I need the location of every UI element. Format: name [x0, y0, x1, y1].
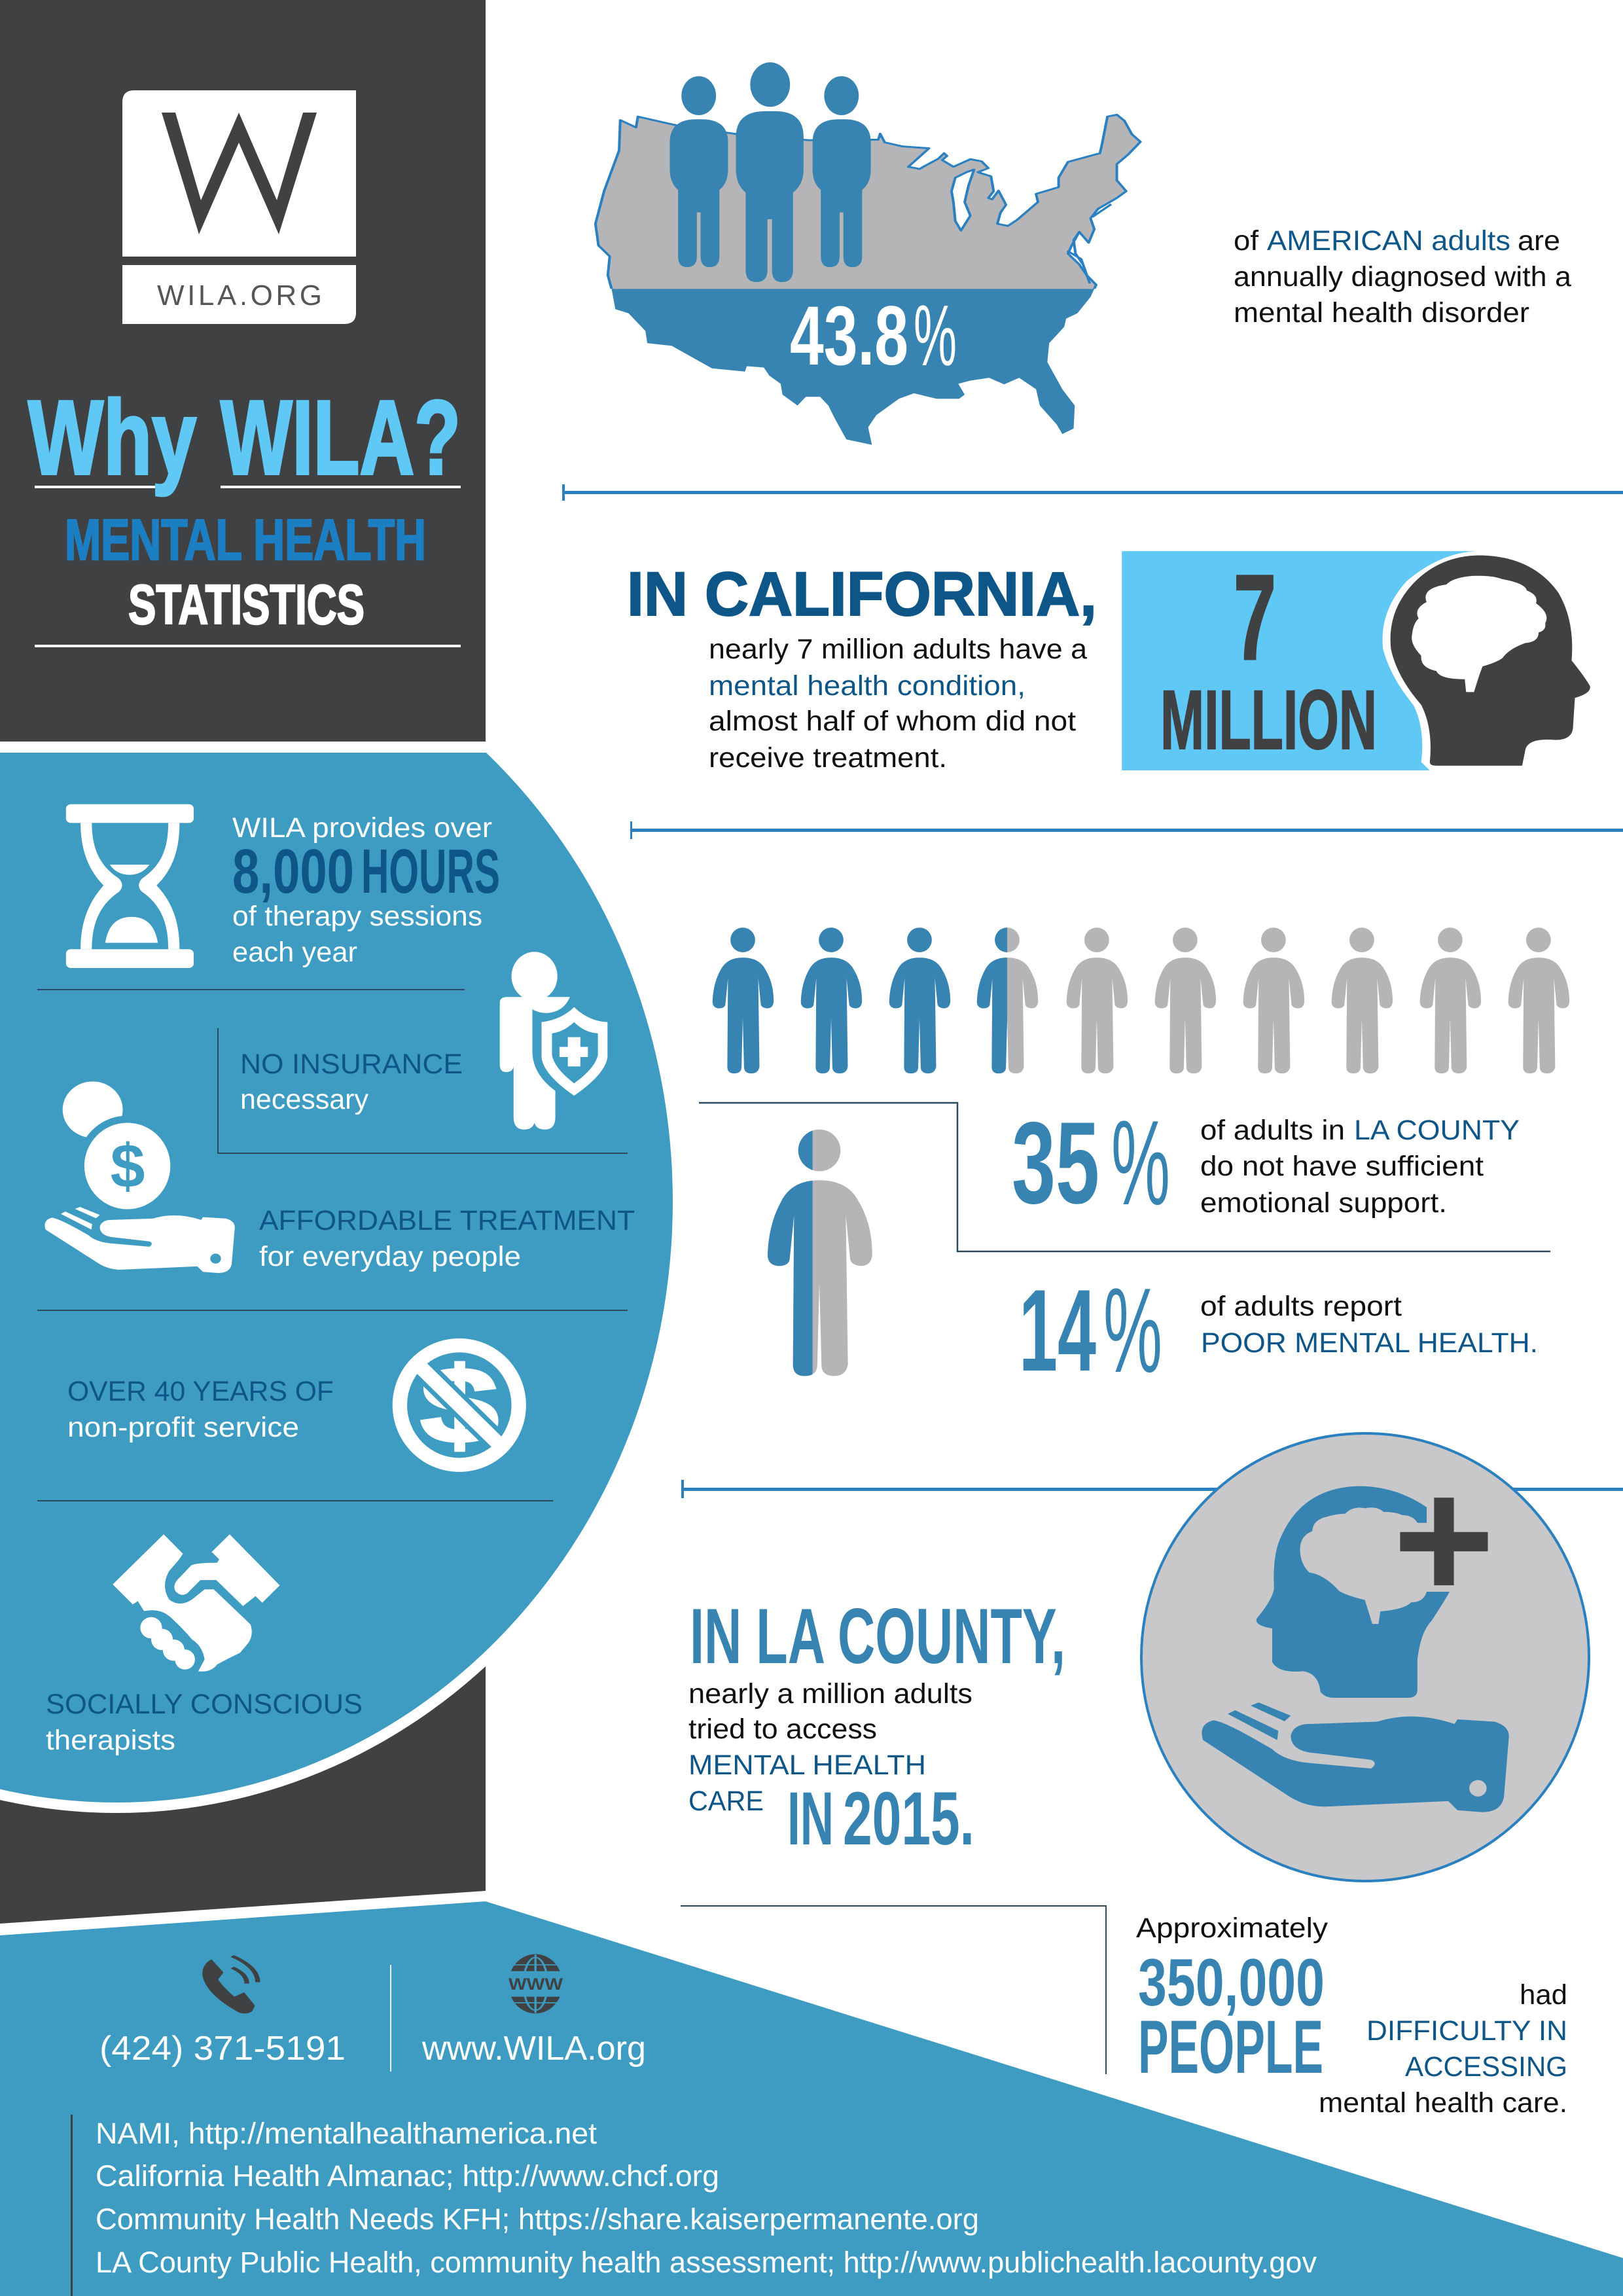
text: socially conscious therapists: therapists [46, 1725, 175, 1756]
text: sources list: LA County Public Health, community health assessment; http://www.publichealth.lacounty.gov [96, 2246, 1317, 2279]
text: sources list: Community Health Needs KFH; https://share.kaiserpermanente.org [96, 2202, 979, 2236]
text: WILA provides over 8,000 hours: of therapy sessions [232, 901, 482, 932]
divider: after California [630, 821, 1623, 839]
text: website: www.WILA.org [421, 2030, 646, 2068]
text: approximately 350,000 people: Approximately [1136, 1912, 1329, 1944]
icon: no dollar sign: $ [420, 1345, 499, 1465]
text: affordable treatment [259, 1205, 635, 1272]
icon: no dollar sign [393, 1338, 526, 1472]
text: California statistic [709, 634, 1087, 774]
text: nearly a million adults in 2015: MENTAL HEALTH [688, 1749, 926, 1781]
text: sources list [71, 2115, 1317, 2296]
panel: 7 million with head icon [1122, 550, 1590, 770]
services: over 40 years non-profit [67, 1338, 526, 1472]
text: sources list: California Health Almanac; http://www.chcf.org [96, 2159, 719, 2193]
text: phone number: (424) 371-5191 [99, 2030, 346, 2068]
text: difficulty accessing care [1319, 1979, 1567, 2119]
text: poor mental health: of adults report [1200, 1291, 1402, 1322]
text: approximately 350,000 people [1136, 1912, 1329, 2089]
text: American adults statistic: are [1518, 225, 1560, 257]
icon: large half-filled person [768, 1130, 872, 1376]
text: sources list: NAMI, http://mentalhealthamerica.net [96, 2117, 597, 2150]
text: LA County emotional support: LA COUNTY [1354, 1115, 1520, 1146]
text: socially conscious therapists: SOCIALLY CONSCIOUS [46, 1689, 363, 1720]
text: socially conscious therapists [46, 1689, 363, 1756]
chart: ten person pictogram [713, 927, 1569, 1073]
text: LA County emotional support [1200, 1115, 1520, 1219]
text: American adults statistic: annually diagnosed with a [1234, 261, 1571, 293]
icon: www globe: WWW [508, 1975, 563, 1994]
text: difficulty accessing care: mental health care. [1319, 2087, 1567, 2119]
text: WILA provides over 8,000 hours: 8,000 [232, 836, 354, 906]
map: United States with 43.8% fill: % [914, 287, 957, 384]
icon: www globe [505, 1954, 566, 2013]
text: LA County emotional support: emotional support. [1200, 1187, 1447, 1219]
icon: coins over hand: $ [111, 1132, 145, 1201]
text: no insurance necessary [240, 1049, 463, 1115]
text: nearly a million adults in 2015: nearly a million adults [688, 1678, 972, 1710]
text: over 40 years: non-profit service [67, 1412, 299, 1443]
text: nearly a million adults in 2015: 2015. [843, 1777, 974, 1861]
text: affordable treatment: AFFORDABLE TREATMENT [259, 1205, 635, 1236]
icon: coins over hand [45, 1081, 235, 1273]
text: WILA provides over 8,000 hours [232, 812, 500, 968]
text: LA County emotional support: of adults in [1200, 1115, 1345, 1146]
text: WILA provides over 8,000 hours: WILA provides over [232, 812, 492, 844]
text: American adults statistic: of [1234, 225, 1259, 257]
icon: person with shield [500, 952, 607, 1130]
map: United States with 43.8% fill [596, 62, 1141, 445]
text: nearly a million adults in 2015: CARE [688, 1785, 764, 1817]
icon: hourglass [66, 804, 194, 968]
panel: 7 million with head icon: 7 [1234, 550, 1276, 685]
text: WILA provides over 8,000 hours: HOURS [361, 836, 500, 906]
stat: 35%: % [1111, 1095, 1170, 1230]
subtitle: mental health statistics [35, 507, 461, 647]
text: poor mental health [1200, 1291, 1538, 1359]
text: California statistic: almost half of whom did not [709, 706, 1076, 737]
text: affordable treatment: for everyday people [259, 1241, 521, 1272]
divider: LA County section [681, 1480, 1623, 1498]
title: Why WILA? [28, 379, 461, 497]
services: affordable treatment [45, 1081, 635, 1273]
logo: WILA.ORG [122, 90, 356, 324]
map: United States with 43.8% fill: 43.8 [790, 289, 908, 383]
panel: dark sidebar background [0, 0, 486, 1924]
stat: 14%: % [1103, 1263, 1162, 1397]
text: over 40 years: OVER 40 YEARS OF [67, 1376, 334, 1407]
subtitle: mental health statistics: MENTAL HEALTH [65, 507, 426, 572]
panel: blue footer background [0, 1901, 1623, 2296]
text: difficulty accessing care: ACCESSING [1405, 2051, 1567, 2083]
title: Why WILA?: Why [28, 379, 196, 497]
text: California statistic: mental health condition, [709, 670, 1026, 702]
text: over 40 years [67, 1376, 334, 1443]
text: difficulty accessing care: DIFFICULTY IN [1366, 2015, 1567, 2047]
text: WILA provides over 8,000 hours: each year [232, 937, 357, 968]
text: no insurance necessary: NO INSURANCE [240, 1049, 463, 1080]
text: poor mental health: POOR MENTAL HEALTH. [1201, 1327, 1538, 1359]
text: nearly a million adults in 2015: tried to access [688, 1713, 877, 1745]
heading: In California: IN CALIFORNIA, [627, 560, 1097, 629]
stat: 14%: 14 [1019, 1265, 1096, 1395]
icon: head and hand in circle [1141, 1433, 1589, 1881]
panel: blue services circle background [0, 753, 673, 1813]
services: 8,000 hours [66, 804, 500, 968]
stat: 35%: 35 [1012, 1098, 1099, 1228]
subtitle: mental health statistics: STATISTICS [128, 574, 365, 636]
text: California statistic: nearly 7 million adults have a [709, 634, 1087, 665]
text: nearly a million adults in 2015 [688, 1678, 974, 1861]
text: difficulty accessing care: had [1520, 1979, 1567, 2011]
text: nearly a million adults in 2015: IN [787, 1777, 834, 1861]
icon: telephone [202, 1956, 258, 2013]
services: no insurance [218, 952, 628, 1153]
text: American adults statistic [1234, 225, 1571, 329]
text: LA County emotional support: do not have sufficient [1200, 1151, 1484, 1182]
text: approximately 350,000 people: PEOPLE [1138, 2005, 1323, 2089]
divider: after map [562, 484, 1623, 501]
text: no insurance necessary: necessary [240, 1084, 368, 1115]
logo: WILA.ORG: WILA.ORG [157, 279, 322, 312]
text: American adults statistic: mental health disorder [1234, 297, 1529, 329]
text: American adults statistic: AMERICAN adults [1267, 225, 1510, 257]
text: approximately 350,000 people: 350,000 [1138, 1945, 1325, 2020]
services: socially conscious [46, 1534, 363, 1756]
icon: handshake [113, 1534, 279, 1672]
title: Why WILA?: WILA? [221, 379, 461, 497]
text: California statistic: receive treatment. [709, 742, 947, 774]
panel: 7 million with head icon: MILLION [1160, 673, 1377, 767]
heading: In LA County: IN LA COUNTY, [690, 1592, 1065, 1680]
